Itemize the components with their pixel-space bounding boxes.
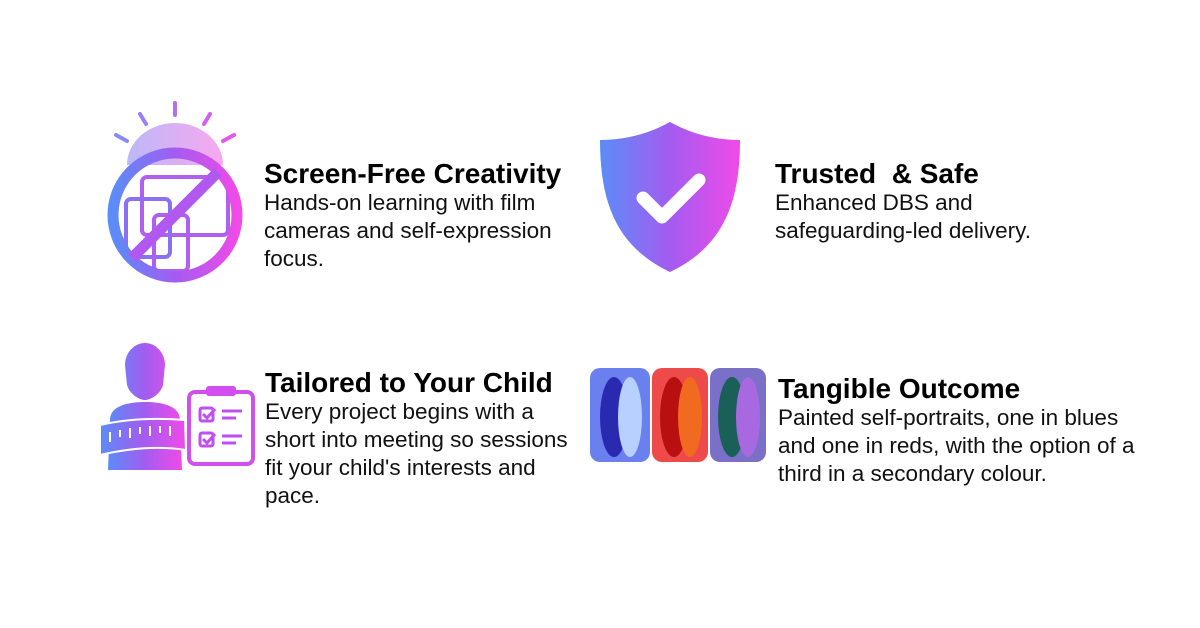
text: tangible outcome: third in a secondary colour. [778, 461, 1047, 486]
text: tangible outcome: Painted self-portraits, one in blues [778, 405, 1118, 430]
text: tailored to your child: pace. [265, 483, 320, 508]
image: three portraits [590, 368, 766, 462]
text: screen-free creativity: cameras and self-expression [264, 218, 552, 243]
text: tailored to your child [265, 367, 568, 508]
text: trusted & safe: Trusted & Safe [775, 158, 979, 189]
text: tangible outcome: Tangible Outcome [778, 373, 1020, 404]
text: tangible outcome [778, 373, 1134, 486]
text: tailored to your child: fit your child's interests and [265, 455, 536, 480]
text: tailored to your child: Every project begins with a [265, 399, 534, 424]
text: screen-free creativity: Hands-on learning with film [264, 190, 535, 215]
text: screen-free creativity [264, 158, 561, 271]
text: tailored to your child: short into meeting so sessions [265, 427, 568, 452]
text: screen-free creativity: focus. [264, 246, 324, 271]
text: screen-free creativity: Screen-Free Creativity [264, 158, 561, 189]
icon: shield [600, 122, 740, 272]
text: tangible outcome: and one in reds, with the option of a [778, 433, 1134, 458]
icon: screen-free [108, 101, 242, 282]
text: trusted & safe: Enhanced DBS and [775, 190, 973, 215]
text: tailored to your child: Tailored to Your Child [265, 367, 553, 398]
text: trusted & safe: safeguarding-led delivery. [775, 218, 1031, 243]
icon: tailored [101, 343, 255, 470]
text: trusted & safe [775, 158, 1031, 243]
